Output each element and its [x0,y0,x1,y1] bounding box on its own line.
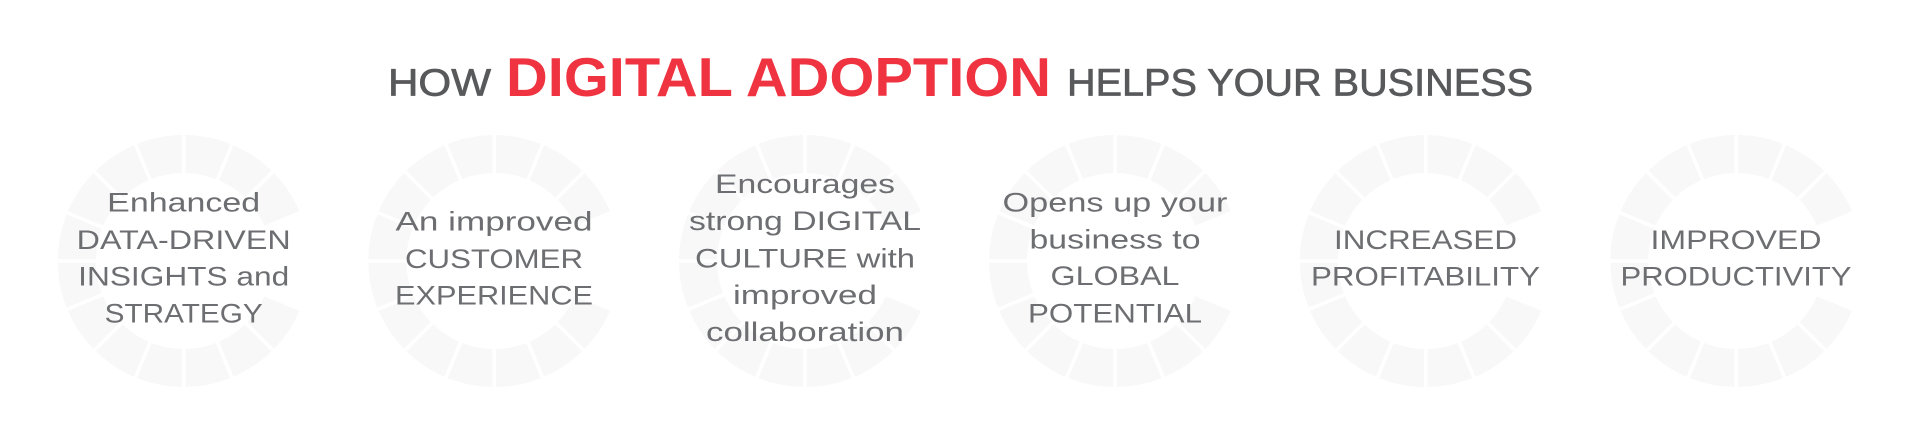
title: HELPS YOUR BUSINESS [1067,62,1533,104]
panel: data-driven insights: DATA-DRIVEN [77,225,291,255]
panel: data-driven insights: STRATEGY [105,298,263,328]
panel: increased profitability: PROFITABILITY [1311,262,1540,292]
panel: global potential: GLOBAL [1050,261,1180,291]
title [388,46,1533,108]
panel: improved productivity [1604,129,1876,393]
panel: global potential [983,129,1255,393]
panel: digital culture: collaboration [706,317,904,347]
panel: customer experience: CUSTOMER [405,244,583,274]
panel: improved productivity: IMPROVED [1650,225,1822,255]
panel: digital culture [673,129,945,393]
panel: digital culture: strong DIGITAL [689,206,921,236]
panel: data-driven insights: Enhanced [107,187,260,217]
title: DIGITAL ADOPTION [506,46,1051,108]
panel: global potential: business to [1030,224,1200,254]
panel: increased profitability: INCREASED [1334,225,1517,255]
panel: customer experience: An improved [396,207,592,237]
panel: improved productivity: PRODUCTIVITY [1620,262,1852,292]
panel: data-driven insights [52,129,324,393]
panel: global potential: POTENTIAL [1028,298,1202,328]
title: HOW [388,62,491,104]
panel: customer experience [362,129,634,393]
panel: digital culture: Encourages [715,169,895,199]
panel: digital culture: improved [733,280,877,310]
panel: digital culture: CULTURE with [695,243,915,273]
panel: customer experience: EXPERIENCE [395,281,593,311]
panel: increased profitability [1294,129,1566,393]
panel: global potential: Opens up your [1002,187,1228,217]
panel: data-driven insights: INSIGHTS and [78,262,289,292]
